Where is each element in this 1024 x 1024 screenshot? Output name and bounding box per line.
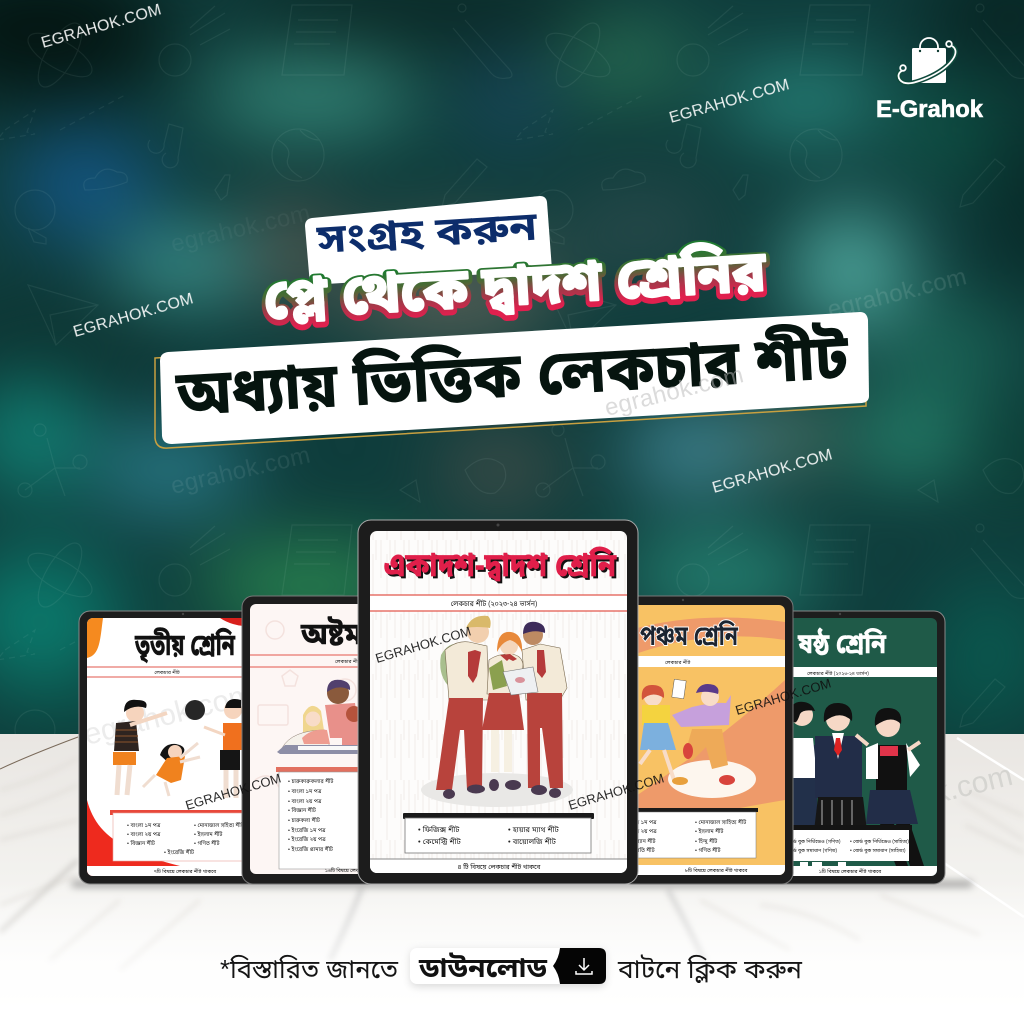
subject list: • কেমেস্ট্রি শীট: [418, 837, 462, 846]
watermark labels: EGRAHOK.COM: [71, 290, 195, 341]
headline line 2: প্লে থেকে দ্বাদশ শ্রেনির: [262, 241, 768, 333]
title: পঞ্চম শ্রেনি: [640, 619, 738, 651]
kids illustration: [113, 699, 243, 798]
tablet: class 6: লেকচার শীট (২০২৩-২৪ ভার্সন): [807, 670, 869, 677]
watermark labels: EGRAHOK.COM: [667, 76, 791, 127]
subject list: • মোনাজাল সাহিত্য শীট: [695, 818, 747, 826]
tablet: class 11-12: একাদশ-দ্বাদশ শ্রেনি: [384, 547, 617, 583]
watermark labels on tablets: EGRAHOK.COM: [567, 770, 666, 813]
subject list: • বাংলা ২য় পত্র: [288, 798, 322, 805]
footer band: [370, 859, 627, 873]
screen faint watermark: egrahok.com: [81, 678, 257, 752]
subject list: • ইংরেজি শীট: [164, 848, 195, 856]
subject list: • বাংলা ১ম পত্র: [127, 822, 161, 829]
banner: chapter-wise lecture sheet: অধ্যায় ভিত্তিক লেকচার শীট: [174, 322, 851, 429]
tablet: class 8: [242, 596, 370, 884]
subject list: র্ড বুক নির্ভিডেও (গণিত): [792, 838, 841, 845]
watermark labels: EGRAHOK.COM: [710, 446, 834, 497]
watermark labels on tablets: EGRAHOK.COM: [184, 770, 283, 813]
tablet: class 11-12: [358, 520, 638, 884]
tablet: class 11-12: ৪ টি বিষয়ে লেকচার শীট থাকবে: [458, 863, 541, 871]
faint watermarks: [168, 200, 969, 500]
subject list: • বিজ্ঞান শীট: [288, 806, 317, 814]
tablet: class 5: লেকচার শীট: [665, 660, 691, 666]
banner faint watermark: egrahok.com: [602, 361, 746, 422]
corner decoration: [87, 618, 103, 658]
subject list: • গণিত শীট: [695, 846, 722, 854]
download button: [410, 948, 606, 987]
headline line 2: প্লে থেকে দ্বাদশ শ্রেনির: [262, 239, 768, 331]
tablet: class 11-12: লেকচার শীট (২০২৩-২৪ ভার্সন): [451, 600, 537, 608]
subject list: • ইংরেজি গ্রামার শীট: [288, 845, 334, 853]
tablet: class 8: লেকচার শীট: [335, 659, 361, 665]
headline: [155, 196, 869, 448]
tablet: class 6: [782, 610, 946, 884]
tablet: class 8: ১৩টি বিষয়ে লেকচার: [325, 868, 368, 874]
students illustration: [277, 680, 362, 754]
title: তৃতীয় শ্রেনি: [134, 627, 235, 663]
subject list: গ্যান শীট: [636, 837, 657, 845]
tablet: class 5: [620, 596, 793, 884]
subject list: • চারুকারুকলার শীট: [288, 777, 334, 785]
subject list: [110, 810, 257, 861]
subject list: র্ড বুক সমাধান (গণিত): [792, 847, 837, 854]
title: অষ্টম শ্রেনি: [300, 616, 431, 651]
subject list: [630, 808, 758, 858]
subject list: [276, 767, 358, 870]
subject list: • হিন্দু শীট: [695, 837, 718, 845]
students illustration: [790, 702, 924, 866]
subject list: • ইসলাম শীট: [695, 827, 724, 835]
download button: ডাউনলোড: [418, 952, 548, 983]
logo: E-Grahok: [876, 38, 984, 123]
subject list: • ইসলাম শীট: [194, 830, 223, 838]
tablet: class 3: [79, 611, 264, 884]
subject list: • ফিজিক্স শীট: [418, 825, 460, 834]
subject list: • মোনাজাল সহিত্য শীট: [194, 821, 245, 829]
floor: white wooden planks: [0, 734, 1024, 1024]
subject list: [785, 825, 912, 861]
faint watermarks: egrahok.com: [168, 442, 313, 500]
subject list: • ইংরেজি ২য় পত্র: [288, 835, 326, 843]
subject list: • চারুকলা শীট: [288, 816, 321, 824]
tablet: class 3: লেকচার শীট: [154, 670, 180, 676]
students illustration: [640, 679, 756, 798]
text: for details: *বিস্তারিত জানতে: [220, 954, 399, 984]
watermark labels on tablets: EGRAHOK.COM: [374, 623, 473, 666]
tablet: class 3: ৭টি বিষয়ে লেকচার শীট থাকবে: [154, 869, 217, 875]
subject list: • বোর্ড বুক সমাধান (সাহিত্য): [850, 847, 906, 854]
tablet: class 5: ৮টি বিষয়ে লেকচার শীট থাকবে: [685, 868, 748, 874]
subject list: গতি শীট: [636, 846, 656, 854]
title: ষষ্ঠ শ্রেনি: [797, 626, 887, 659]
faint watermarks: egrahok.com: [168, 200, 313, 258]
faint watermarks: egrahok.com: [825, 263, 969, 324]
floor faint watermark: egrahok.com: [840, 759, 1016, 833]
watermark labels: [39, 1, 834, 497]
subtitle band: [370, 595, 627, 611]
subject list: • গণিত শীট: [194, 839, 221, 847]
text: click the button: বাটনে ক্লিক করুন: [617, 954, 802, 984]
subject list: • বাংলা ১ম পত্র: [288, 788, 322, 795]
call to action: [220, 948, 802, 987]
subject list: [403, 813, 594, 853]
watermark labels on tablets: EGRAHOK.COM: [734, 675, 833, 718]
subject list: • বোর্ড বুক নির্ভিডেও (সাহিত্য): [850, 838, 909, 845]
subject list: • হায়ার ম্যাথ শীট: [508, 825, 560, 834]
tablet shadows: [72, 881, 972, 887]
subject list: র ২য় পত্র: [635, 828, 657, 835]
label box: collect: সংগ্রহ করুন: [315, 205, 539, 262]
students illustration: [421, 616, 573, 807]
icon: shopping bag: [899, 38, 956, 83]
subject list: • বিজ্ঞান শীট: [127, 839, 156, 847]
watermark labels: EGRAHOK.COM: [39, 1, 163, 52]
label box: collect: [305, 196, 552, 285]
subject list: • ইংরেজি ১ম পত্র: [288, 826, 326, 834]
tablet: class 6: ১টি বিষয়ে লেকচার শীট থাকবে: [819, 869, 882, 875]
subject list: র ১ম পত্র: [635, 819, 657, 826]
icon: download: [576, 958, 592, 974]
watermark labels on tablets: [184, 623, 833, 813]
subject list: • বায়োলজি শীট: [508, 837, 557, 846]
title: একাদশ-দ্বাদশ শ্রেনি: [386, 549, 619, 585]
subject list: • বাংলা ২য় পত্র: [127, 831, 161, 838]
brand name: E-Grahok: [876, 96, 984, 123]
